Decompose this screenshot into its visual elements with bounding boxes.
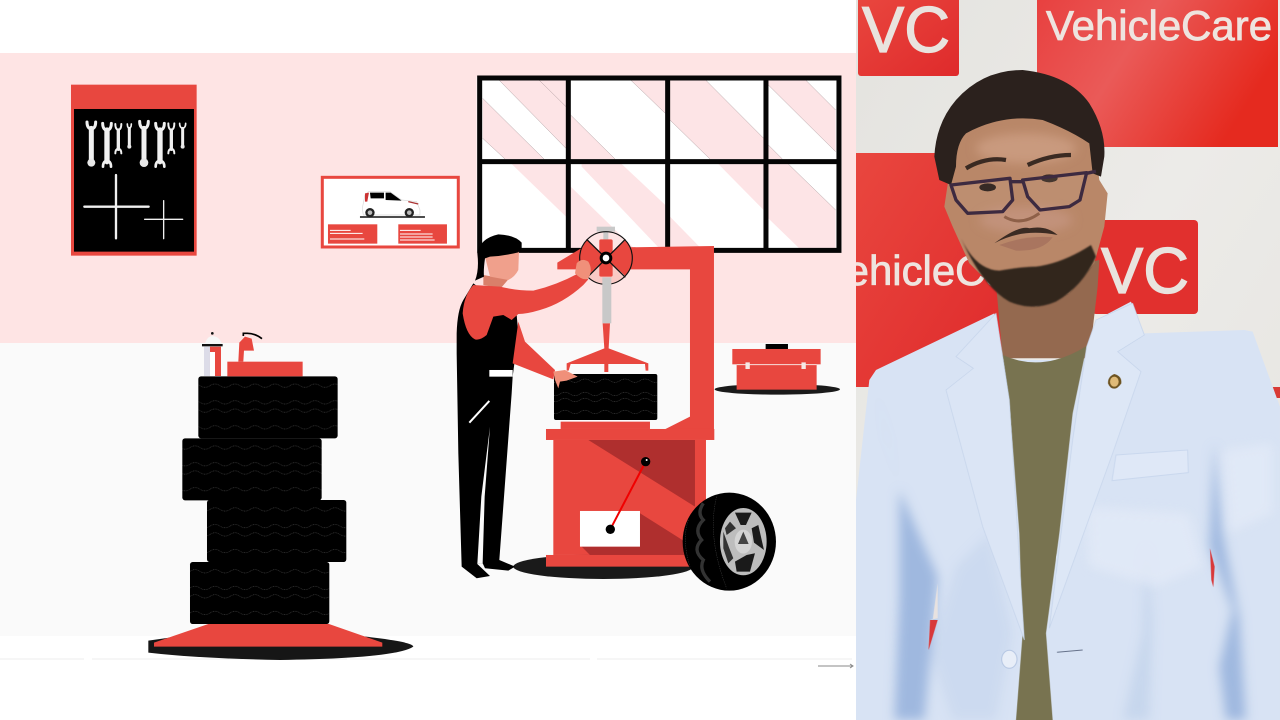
gap: arm and torso left <box>929 583 938 650</box>
hair <box>934 70 1104 185</box>
face <box>944 93 1108 307</box>
reflection lines <box>483 79 836 210</box>
lever <box>606 457 650 534</box>
backdrop logo: VehicleCare top: VehicleCare <box>1046 2 1272 49</box>
neck <box>996 260 1099 358</box>
tyre on machine <box>554 374 657 420</box>
tyre changer machine <box>513 227 776 591</box>
belt <box>489 370 513 377</box>
glasses <box>951 171 1096 213</box>
tool board <box>71 85 197 256</box>
jacket button <box>1002 650 1017 668</box>
toolbox latches <box>748 362 804 369</box>
moustache <box>994 227 1058 243</box>
shirt and raised arm <box>463 273 588 340</box>
cabinet lower shadow <box>582 513 685 555</box>
large cross wrench <box>84 175 149 238</box>
backdrop logo: VehicleCare top <box>1037 0 1278 147</box>
left lapel <box>946 313 1024 640</box>
toolbox <box>715 344 840 395</box>
press clamp <box>567 323 648 372</box>
small arrow mark <box>818 664 853 668</box>
window with light reflections <box>477 77 842 252</box>
right eye <box>1041 174 1058 182</box>
man: jacket and shirt <box>856 302 1280 720</box>
board black panel <box>74 109 194 252</box>
toolbox body <box>737 365 817 390</box>
wall poster with car <box>322 177 458 247</box>
panel: portrait photo <box>820 0 1280 720</box>
eyes <box>979 183 996 191</box>
backdrop logo: VC middle <box>1092 220 1198 314</box>
breast pocket <box>1112 450 1188 481</box>
backdrop logo: VehicleCare left: VehicleCare <box>820 247 1046 294</box>
lips <box>999 237 1053 251</box>
press shaft <box>602 277 611 323</box>
jacket highlights <box>1086 443 1273 587</box>
pocket line <box>469 401 489 423</box>
window reflections <box>483 79 836 249</box>
cabinet dark panel <box>588 440 695 507</box>
hair <box>475 234 522 281</box>
gap: arm and torso right <box>1210 548 1215 587</box>
poster frame <box>322 177 458 247</box>
machine table <box>546 422 714 440</box>
handwheel <box>579 226 633 285</box>
machine base <box>546 555 689 567</box>
wheel <box>683 493 776 591</box>
press arm <box>557 246 714 429</box>
right lapel <box>1049 303 1144 628</box>
board frame <box>71 85 197 256</box>
panel: workshop illustration background <box>0 0 856 720</box>
jacket body <box>856 302 1280 720</box>
face <box>485 251 519 280</box>
nose shadow <box>1004 213 1039 221</box>
red box on tyres <box>227 362 303 376</box>
toolbox shadow <box>715 384 840 395</box>
spray bottle <box>202 332 223 376</box>
fire extinguisher <box>238 333 262 362</box>
backdrop logo: VC middle: VC <box>1101 234 1189 307</box>
tyre 2 <box>182 438 322 500</box>
eyebrows <box>966 155 1071 168</box>
machine cabinet <box>553 440 706 555</box>
small cross wrench <box>145 201 183 239</box>
lower hand <box>553 370 578 388</box>
beard <box>961 238 1096 307</box>
mechanic <box>457 234 591 578</box>
forehead highlight <box>976 133 1076 163</box>
backdrop logo: VehicleCare left <box>820 153 1046 387</box>
leg gap <box>477 427 490 564</box>
car <box>360 192 425 217</box>
stack of tyres <box>148 332 413 660</box>
buttonhole <box>1057 650 1083 652</box>
red base <box>154 624 382 647</box>
t-shirt <box>1003 346 1087 720</box>
upper hand <box>575 260 591 279</box>
poster red panel left <box>328 224 377 244</box>
cheek highlight <box>979 207 1073 233</box>
tyre 1 <box>198 376 338 438</box>
wrenches <box>87 121 186 167</box>
lower arm <box>513 322 555 379</box>
photo backdrop <box>856 0 1280 720</box>
pedal box <box>580 511 640 547</box>
toolbox handle <box>766 344 788 349</box>
lapel pin <box>1108 374 1121 389</box>
man: head <box>934 70 1108 358</box>
tyre treads <box>182 376 346 624</box>
base shadow <box>148 636 413 660</box>
backdrop red edge <box>1272 387 1280 398</box>
jacket shadows <box>876 387 1246 720</box>
overalls <box>457 283 518 578</box>
tyre 4 <box>190 562 329 624</box>
poster red panel right <box>398 224 447 244</box>
toolbox lid <box>732 349 821 364</box>
toolbox lid line <box>737 363 817 366</box>
window frame <box>480 78 839 250</box>
neck <box>483 275 508 288</box>
tyre 3 <box>207 500 346 562</box>
machine shadow <box>513 554 693 579</box>
